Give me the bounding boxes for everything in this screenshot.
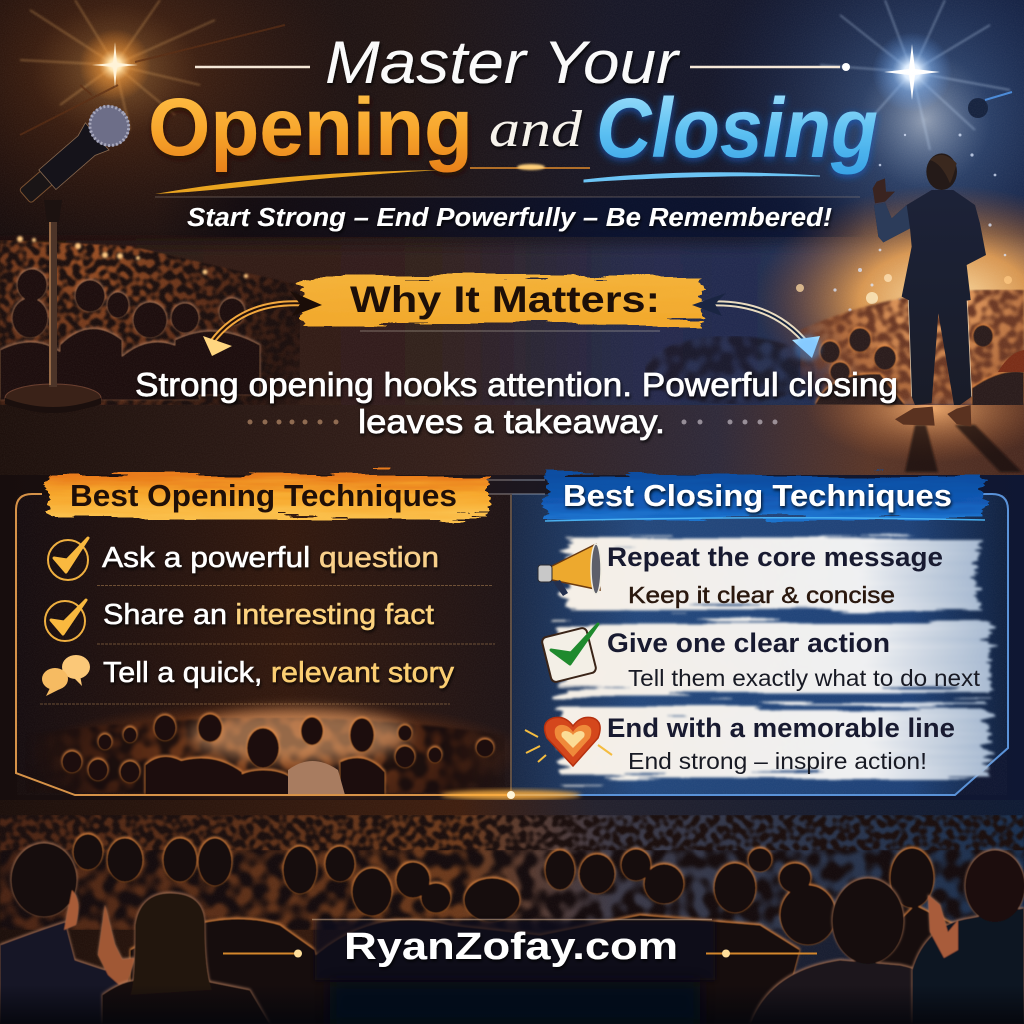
- spotlight: right cool burst: [820, 0, 1012, 150]
- item: end with a memorable line: End strong – inspire action!: [628, 748, 927, 774]
- stage floor: [0, 0, 1024, 475]
- title: and: and: [489, 101, 583, 158]
- audience: upper left crowd: [0, 236, 300, 405]
- item: end with a memorable line: End with a memorable line: [607, 713, 955, 743]
- banner: Why It Matters: Why It Matters:: [350, 279, 660, 320]
- header: best closing techniques: [545, 475, 985, 521]
- spotlight: left warm burst: [20, 0, 285, 135]
- item: tell a quick relevant story: [42, 655, 455, 696]
- footer: website band: [223, 920, 817, 1024]
- banner: Why It Matters: [302, 276, 702, 331]
- body text: why it matters: [135, 366, 898, 440]
- opening panel audience: [25, 700, 530, 804]
- item: repeat the core message: [538, 538, 978, 610]
- item: ask a powerful question: Ask a powerful question: [102, 542, 439, 574]
- panel: closing techniques: [512, 480, 1008, 795]
- icon: speech bubbles: [42, 655, 90, 696]
- item: share an interesting fact: [45, 599, 434, 641]
- title: Master Your: [195, 29, 850, 96]
- microphone on stand: [5, 97, 138, 413]
- front row left person: [0, 843, 135, 1024]
- icon: megaphone: [538, 544, 601, 596]
- icon: check circle: [45, 600, 86, 641]
- audience: upper right crowd: [645, 290, 1024, 406]
- front row far right person: [912, 850, 1024, 1024]
- speaker silhouette: [873, 153, 986, 427]
- item: tell a quick relevant story: Tell a quick, relevant story: [103, 657, 455, 689]
- body text: why it matters: Strong opening hooks attention. Powerful closing: [135, 366, 898, 403]
- panel: opening techniques: [16, 480, 530, 804]
- swoosh: gold underline: [155, 164, 590, 194]
- arrow: right blue: [692, 293, 821, 361]
- arrow: left gold: [203, 291, 322, 356]
- item: give one clear action: [541, 623, 990, 694]
- item: give one clear action: Give one clear action: [607, 628, 890, 658]
- item: repeat the core message: Repeat the core message: [607, 542, 943, 572]
- swoosh: blue underline: [584, 173, 820, 182]
- subtitle: Start Strong – End Powerfully – Be Remembered!: [187, 204, 833, 232]
- front row second person: [102, 893, 270, 1024]
- body text: why it matters: leaves a takeaway.: [358, 403, 665, 440]
- opening item separators: [40, 586, 495, 704]
- icon: check circle: [48, 538, 88, 580]
- footer: website band: RyanZofay.com: [344, 926, 678, 968]
- audience: bottom crowd: [0, 800, 1024, 1024]
- title: Closing: Closing: [596, 81, 878, 175]
- item: ask a powerful question: [48, 538, 439, 580]
- glow: panel bottom line: [75, 790, 955, 800]
- item: share an interesting fact: Share an interesting fact: [103, 599, 434, 631]
- subtitle: [150, 197, 865, 237]
- header: best opening techniques: [48, 474, 488, 518]
- header: best closing techniques: Best Closing Techniques: [563, 478, 952, 513]
- title: Opening: Opening: [148, 82, 473, 173]
- item: repeat the core message: Keep it clear & concise: [628, 582, 895, 608]
- decorative dots: [248, 420, 778, 424]
- icon: green checkbox: [541, 624, 598, 683]
- icon: heart: [525, 717, 612, 766]
- front row right person: [750, 878, 955, 1024]
- item: give one clear action: Tell them exactly what to do next: [628, 665, 980, 691]
- title: Master Your: Master Your: [325, 29, 680, 96]
- item: end with a memorable line: [525, 707, 988, 777]
- header: best opening techniques: Best Opening Techniques: [70, 478, 457, 513]
- sparkles near right spotlight: [796, 134, 1012, 312]
